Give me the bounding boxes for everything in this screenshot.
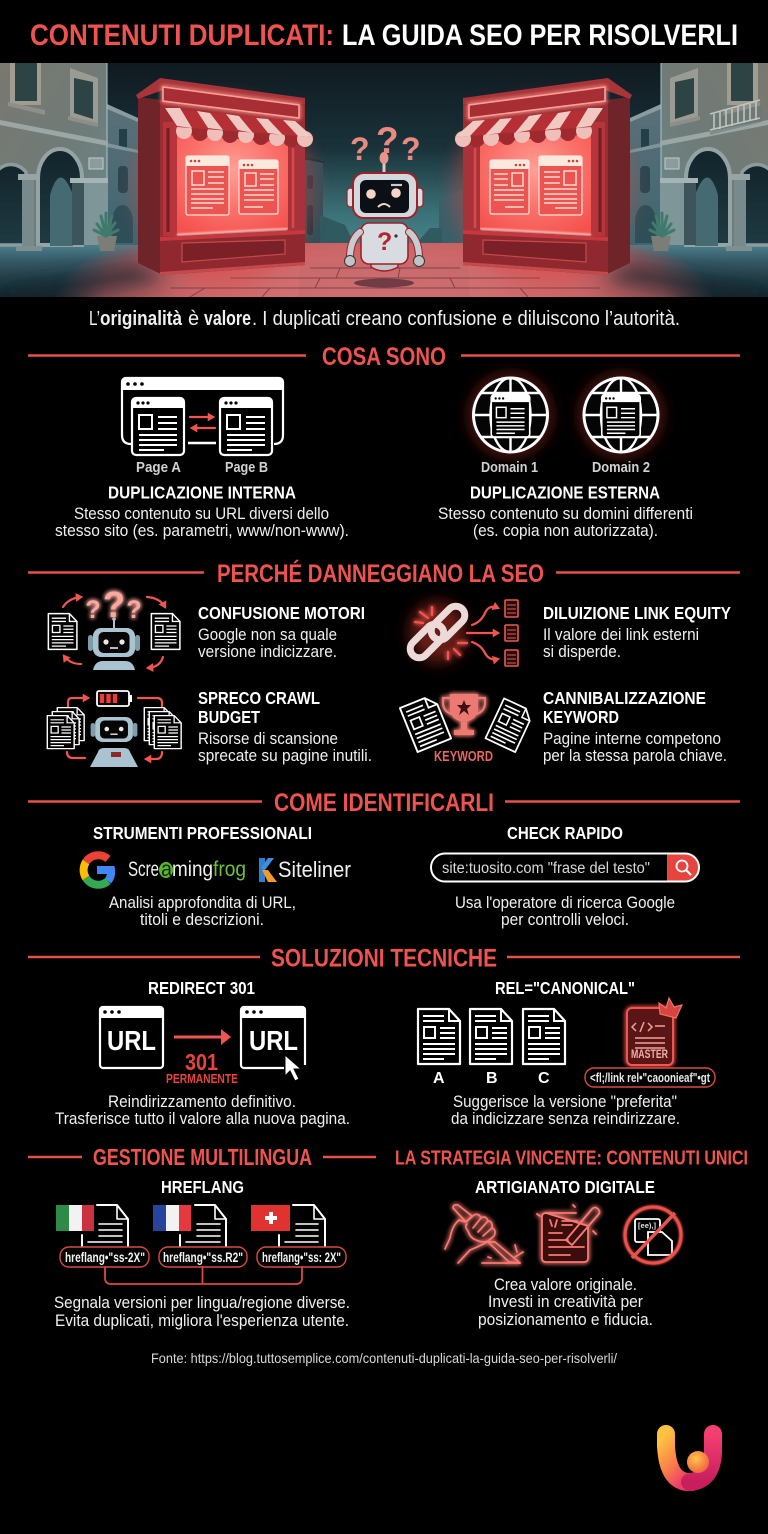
- panel: spreco crawl budget: Risorse di scansione: [198, 730, 338, 748]
- title: [30, 19, 738, 52]
- panel: confusione motori: versione indicizzare.: [198, 643, 337, 661]
- panel: diluizione link equity: [406, 600, 731, 666]
- logo: Screaming Frog: frog: [213, 858, 246, 881]
- panel: artigianato digitale: ARTIGIANATO DIGITALE: [475, 1177, 655, 1197]
- panel: spreco crawl budget: BUDGET: [198, 707, 260, 727]
- code pill: [585, 1068, 715, 1087]
- logo: Screaming Frog: Scre: [128, 858, 159, 881]
- section heading: come identificarli: COME IDENTIFICARLI: [274, 789, 494, 817]
- code pill: <fl;/link rel•"caoonieaf"•gt: [590, 1070, 711, 1085]
- icon: URL browser source: URL: [107, 1025, 156, 1056]
- icon: two pages in one browser: Page B: [225, 460, 268, 476]
- icon: master document with crown: [627, 998, 682, 1065]
- icon: URL browser source: [99, 1006, 164, 1068]
- robot: ?: [377, 228, 392, 256]
- panel: hreflang: HREFLANG: [161, 1177, 244, 1197]
- panel: check rapido: Usa l'operatore di ricerca Google: [455, 894, 675, 912]
- panel: cannibalizzazione keyword: KEYWORD: [543, 707, 619, 727]
- flag and document: Switzerland: [251, 1205, 325, 1247]
- arrow: redirect: [166, 1029, 238, 1086]
- tagline: è: [188, 308, 199, 330]
- panel: check rapido: [431, 823, 699, 929]
- panel: strumenti professionali: STRUMENTI PROFESSIONALI: [93, 823, 312, 843]
- robot: ?: [401, 131, 421, 167]
- icon: confused robot with documents: [48, 584, 180, 670]
- right shopfront: [451, 78, 635, 285]
- panel: artigianato digitale: posizionamento e fiducia.: [478, 1311, 653, 1329]
- panel: rel canonical: da indicizzare senza reindirizzare.: [451, 1110, 680, 1128]
- section heading: cosa sono: COSA SONO: [322, 343, 446, 371]
- panel: duplicazione interna: stesso sito (es. parametri, www/non-www).: [55, 522, 349, 540]
- panel: duplicazione interna: DUPLICAZIONE INTERNA: [108, 482, 296, 502]
- icon: URL browser target with cursor: [241, 1006, 306, 1081]
- section heading: perché danneggiano la SEO: PERCHÉ DANNEGGIANO LA SEO: [217, 559, 544, 588]
- title: CONTENUTI DUPLICATI:: [30, 19, 334, 52]
- tagline: valore: [204, 308, 251, 330]
- icon: two globes: Domain 1: [481, 460, 538, 476]
- search bar: site:tuosito.com "frase del testo": [442, 860, 650, 877]
- icon: trophy between documents: KEYWORD: [434, 749, 493, 765]
- panel: confusione motori: Google non sa quale: [198, 626, 337, 644]
- logo: [666, 1434, 713, 1482]
- panel: diluizione link equity: Il valore dei link esterni: [543, 626, 699, 644]
- right building: [630, 63, 768, 251]
- icon: confused robot with documents: ?: [126, 596, 142, 624]
- hreflang pills: hreflang•"ss.R2": [163, 1250, 243, 1265]
- panel: confusione motori: [48, 584, 365, 670]
- panel: duplicazione esterna: [438, 375, 693, 540]
- icon: URL browser target with cursor: URL: [249, 1025, 298, 1056]
- search bar: [431, 854, 699, 882]
- panel: diluizione link equity: si disperde.: [543, 643, 621, 661]
- arrow: redirect: PERMANENTE: [166, 1072, 238, 1086]
- panel: check rapido: CHECK RAPIDO: [507, 823, 623, 843]
- panel: hreflang: Segnala versioni per lingua/regione diverse.: [54, 1294, 350, 1312]
- left shopfront: [133, 78, 317, 285]
- panel: strumenti professionali: titoli e descrizioni.: [140, 911, 264, 929]
- panel: redirect 301: REDIRECT 301: [148, 978, 255, 998]
- icon: confused robot with documents: ?: [85, 596, 101, 624]
- panel: spreco crawl budget: sprecate su pagine inutili.: [198, 747, 372, 765]
- section heading: soluzioni tecniche: SOLUZIONI TECNICHE: [271, 944, 497, 972]
- panel: strumenti professionali: Analisi approfondita di URL,: [109, 894, 296, 912]
- icon: two pages in one browser: [121, 377, 283, 476]
- logo: Screaming Frog: a: [161, 858, 172, 881]
- icon: three documents: C: [538, 1070, 550, 1087]
- icon: confused robot with documents: ?: [103, 584, 125, 625]
- panel: artigianato digitale: Crea valore originale.: [494, 1276, 637, 1294]
- panel: rel canonical: REL="CANONICAL": [495, 978, 635, 998]
- icon: Google logo: [84, 855, 111, 885]
- icon: two globes: [470, 375, 661, 476]
- icon: three documents: B: [486, 1070, 498, 1087]
- icon: no copying sign: [ee),]: [638, 1221, 657, 1230]
- icon: three documents: A: [433, 1070, 445, 1087]
- panel: rel canonical: Suggerisce la versione "preferita": [453, 1093, 677, 1111]
- icon: master document with crown: MASTER: [631, 1049, 669, 1061]
- panel: strumenti professionali: [84, 823, 351, 929]
- panel: duplicazione interna: [55, 377, 349, 540]
- panel: redirect 301: Reindirizzamento definitivo.: [108, 1093, 296, 1111]
- logo: Screaming Frog: [128, 858, 246, 881]
- robot: [344, 120, 424, 288]
- section heading: gestione multilingua: GESTIONE MULTILINGUA: [93, 1144, 312, 1170]
- panel: confusione motori: CONFUSIONE MOTORI: [198, 603, 365, 623]
- panel: cannibalizzazione keyword: [400, 688, 727, 765]
- icon: broken chain with arrows to documents: [406, 600, 518, 666]
- panel: artigianato digitale: Investi in creatività per: [488, 1293, 643, 1311]
- icon: trophy between documents: [400, 694, 534, 765]
- arrow: canonical: [575, 1036, 613, 1038]
- panel: hreflang: Evita duplicati, migliora l'esperienza utente.: [55, 1312, 349, 1330]
- tagline: L’: [89, 308, 100, 330]
- panel: duplicazione interna: Stesso contenuto su URL diversi dello: [74, 505, 329, 523]
- flag and document: France: [153, 1205, 226, 1247]
- panel: cannibalizzazione keyword: per la stessa parola chiave.: [543, 747, 727, 765]
- icon: no copying sign: [625, 1207, 681, 1263]
- icon: two pages in one browser: Page A: [136, 460, 181, 476]
- panel: redirect 301: [55, 978, 350, 1128]
- icon: document and pencil: [537, 1205, 600, 1262]
- icon: two globes: Domain 2: [592, 460, 650, 476]
- balcony: [710, 100, 762, 135]
- panel: spreco crawl budget: [47, 688, 372, 767]
- hreflang pills: [60, 1247, 346, 1267]
- icon: hand with chisel: [445, 1205, 523, 1263]
- panel: check rapido: per controlli veloci.: [501, 911, 629, 929]
- robot: ?: [376, 120, 399, 161]
- tagline: [89, 308, 680, 330]
- panel: artigianato digitale: [445, 1177, 681, 1329]
- hreflang pills: hreflang•"ss: 2X": [262, 1250, 341, 1265]
- robot: ?: [350, 131, 370, 167]
- tagline: . I duplicati creano confusione e diluiscono l’autorità.: [252, 308, 680, 330]
- tagline: originalità: [100, 308, 183, 330]
- panel: duplicazione esterna: (es. copia non autorizzata).: [473, 522, 658, 540]
- panel: redirect 301: Trasferisce tutto il valore alla nuova pagina.: [55, 1110, 350, 1128]
- panel: cannibalizzazione keyword: CANNIBALIZZAZIONE: [543, 688, 706, 708]
- icon: robot with battery and page stacks: [47, 691, 181, 767]
- flag and document: Italy: [56, 1205, 128, 1247]
- left building: [0, 63, 138, 251]
- panel: spreco crawl budget: SPRECO CRAWL: [198, 688, 320, 708]
- logo: Siteliner: Siteliner: [278, 857, 351, 882]
- icon: three documents: [418, 1009, 565, 1087]
- arrow: redirect: 301: [185, 1049, 218, 1075]
- panel: diluizione link equity: DILUIZIONE LINK EQUITY: [543, 603, 731, 623]
- panel: duplicazione esterna: Stesso contenuto su domini differenti: [438, 505, 693, 523]
- panel: rel canonical: [418, 978, 715, 1128]
- panel: duplicazione esterna: DUPLICAZIONE ESTERNA: [470, 482, 660, 502]
- hero illustration: robot between two shopfronts: [0, 63, 768, 297]
- connector bracket: [105, 1267, 302, 1284]
- hreflang pills: hreflang•"ss-2X": [65, 1250, 145, 1265]
- source line: Fonte: https://blog.tuttosemplice.com/contenuti-duplicati-la-guida-seo-per-risolverli/: [151, 1350, 617, 1366]
- panel: hreflang: [54, 1177, 350, 1330]
- panel: cannibalizzazione keyword: Pagine interne competono: [543, 730, 721, 748]
- logo: Screaming Frog: ming: [172, 858, 213, 881]
